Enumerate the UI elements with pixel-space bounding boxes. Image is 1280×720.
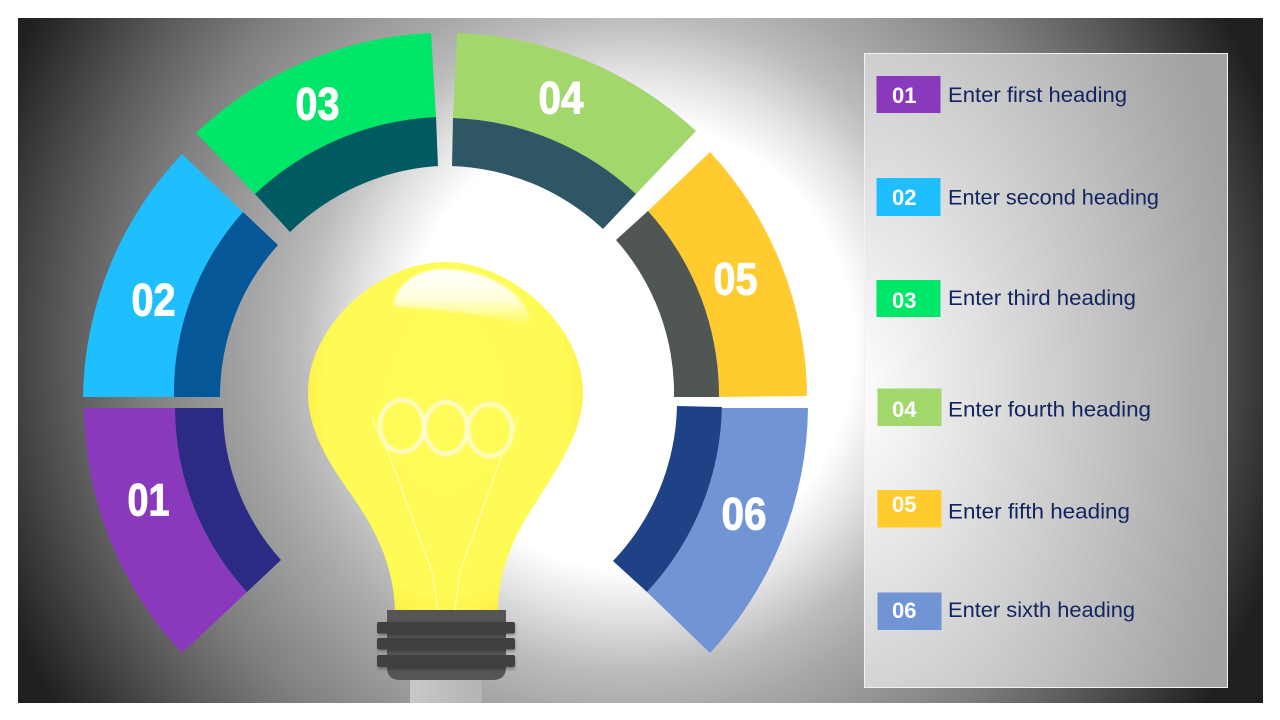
segment 04: 04	[538, 72, 584, 124]
legend item 05: Enter fifth heading	[948, 498, 1130, 524]
glass highlight	[393, 269, 530, 326]
segment 05: 05	[714, 254, 758, 304]
legend item 02	[876, 178, 1159, 216]
legend item 06: 06	[892, 598, 916, 623]
legend panel	[864, 54, 1228, 688]
segment 05	[616, 152, 807, 397]
segment 01	[84, 408, 281, 653]
legend item 01	[876, 76, 1127, 113]
legend item 01: Enter first heading	[948, 82, 1127, 107]
bulb glass	[308, 262, 583, 612]
semicircle segments	[83, 33, 808, 653]
bulb tip	[410, 678, 482, 703]
screw base	[377, 610, 515, 680]
segment 04	[452, 33, 696, 229]
segment 06	[613, 406, 808, 653]
legend item 04: Enter fourth heading	[948, 396, 1151, 422]
legend item 06	[878, 592, 1135, 630]
segment 01: 01	[128, 474, 170, 526]
legend item 05	[878, 490, 1130, 528]
legend item 04: 04	[892, 397, 917, 422]
light bulb	[308, 262, 583, 703]
segment 02	[83, 154, 278, 397]
legend item 03: Enter third heading	[948, 285, 1136, 310]
legend item 06: Enter sixth heading	[948, 597, 1135, 622]
legend item 02: Enter second heading	[948, 184, 1159, 210]
legend item 01: 01	[892, 83, 916, 108]
filament	[372, 400, 518, 610]
segment 03: 03	[296, 78, 340, 130]
legend item 03	[876, 280, 1136, 317]
legend item 03: 03	[892, 288, 916, 313]
segment 06: 06	[722, 488, 766, 540]
legend item 04	[878, 388, 1151, 426]
segment 02: 02	[132, 274, 176, 326]
legend item 02: 02	[892, 185, 916, 210]
legend item 05: 05	[892, 492, 916, 517]
segment 03	[196, 33, 438, 232]
